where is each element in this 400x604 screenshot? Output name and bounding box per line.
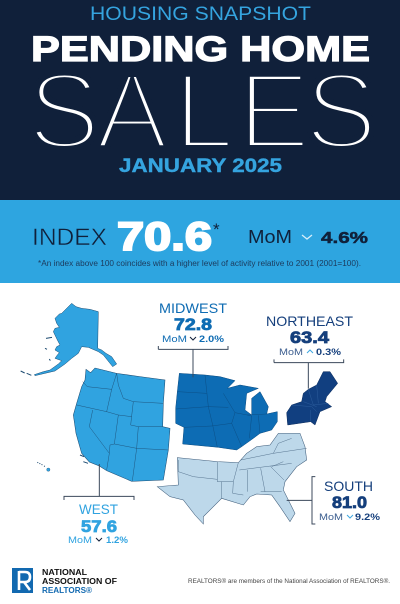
footnote: *An index above 100 coincides with a higher level of activity relative to 2001 (2001=100). xyxy=(38,259,361,268)
west label xyxy=(68,501,129,546)
northeast bracket xyxy=(274,359,344,389)
logo: REALTORS® xyxy=(42,586,92,595)
midwest label: MoM xyxy=(162,334,187,345)
organisation name: NATIONAL xyxy=(42,568,87,577)
index band xyxy=(0,200,400,283)
west label: WEST xyxy=(79,501,118,517)
title line 2: L xyxy=(174,50,234,171)
western states xyxy=(73,368,170,481)
map: eastern regions xyxy=(157,346,344,524)
west label: 57.6 xyxy=(81,518,117,536)
west label: 1.2% xyxy=(106,535,129,546)
south label: 9.2% xyxy=(355,512,381,523)
title line 1: PENDING HOME xyxy=(31,30,370,69)
month over month label: MoM xyxy=(248,227,292,247)
title line 2: S xyxy=(28,50,100,171)
icon: down chevron xyxy=(302,235,312,239)
midwest label: 2.0% xyxy=(199,334,225,345)
northeast label: 0.3% xyxy=(316,347,342,358)
south label: 81.0 xyxy=(332,494,367,512)
midwest label: 72.8 xyxy=(174,316,212,334)
logo xyxy=(12,568,117,595)
midwest label xyxy=(159,300,227,345)
south label: SOUTH xyxy=(324,478,373,494)
month over month value: 4.6% xyxy=(321,230,368,247)
islands xyxy=(21,337,52,375)
west bracket xyxy=(64,464,134,500)
subtitle: HOUSING SNAPSHOT xyxy=(90,4,311,25)
footer note: REALTORS® are members of the National Association of REALTORS®. xyxy=(188,578,390,585)
south label xyxy=(319,478,381,523)
midwest xyxy=(176,373,277,450)
index label: INDEX xyxy=(32,224,107,251)
asterisk: * xyxy=(213,220,220,239)
title line 2: A xyxy=(96,50,168,171)
northeast label: MoM xyxy=(279,347,303,358)
header panel xyxy=(0,0,400,200)
midwest bracket xyxy=(158,346,228,377)
title line 2: S xyxy=(305,50,377,171)
northeast label xyxy=(266,313,353,358)
map: west region xyxy=(21,303,170,500)
south label: MoM xyxy=(319,512,343,523)
west label: MoM xyxy=(68,535,92,546)
south bracket xyxy=(287,477,315,524)
south xyxy=(157,433,307,524)
northeast label: 63.4 xyxy=(290,329,330,347)
date: JANUARY 2025 xyxy=(119,156,283,177)
index value: 70.6 xyxy=(117,215,212,259)
northeast xyxy=(287,372,338,425)
title line 2: E xyxy=(238,50,310,171)
logo: ASSOCIATION OF xyxy=(42,577,117,586)
state borders xyxy=(77,373,168,481)
northeast label: NORTHEAST xyxy=(266,313,353,329)
alaska xyxy=(34,303,117,376)
icon: realtor R xyxy=(12,568,33,593)
midwest label: MIDWEST xyxy=(159,300,227,316)
